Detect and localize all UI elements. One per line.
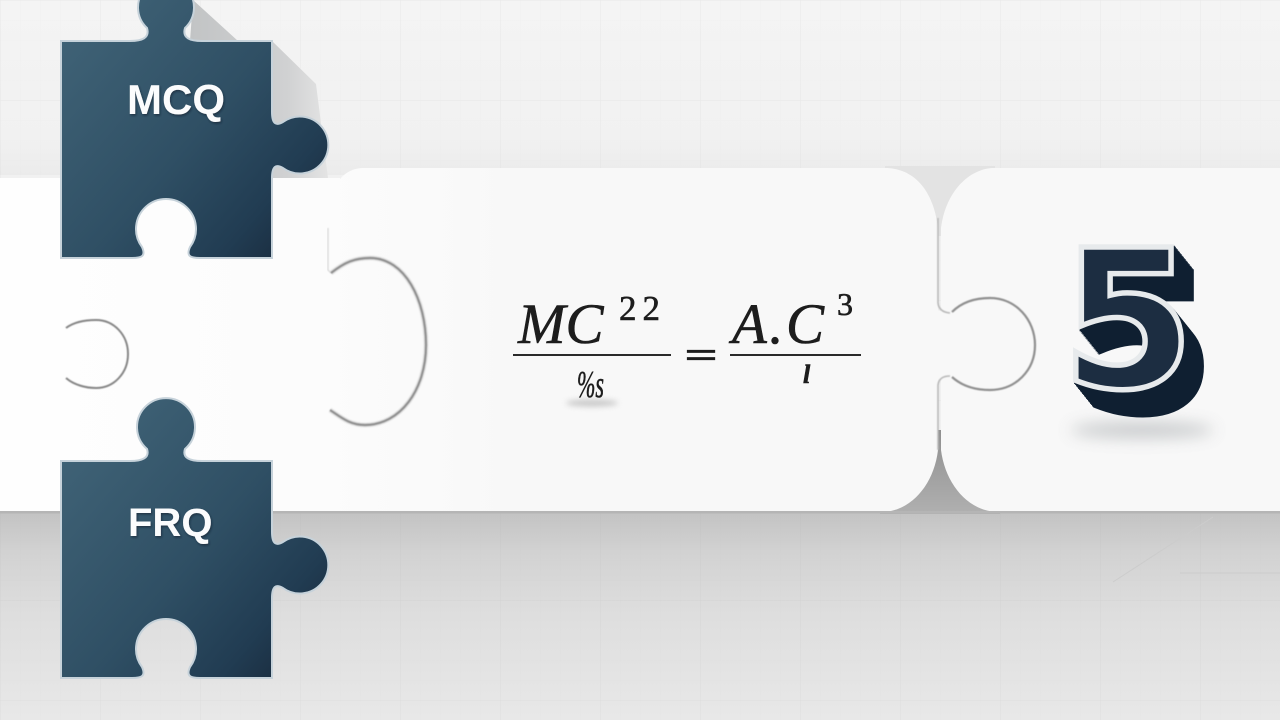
right fraction bar: [730, 354, 861, 356]
right white puzzle piece: [941, 168, 1280, 512]
equation shadow: [566, 400, 618, 406]
panel: white puzzle band: [0, 166, 1280, 514]
seam: middle piece left edge: [328, 228, 331, 273]
band lower edge: [0, 511, 1280, 514]
puzzle piece: MCQ: [61, 0, 328, 258]
seam: vertical edge between middle and right pieces: [938, 218, 950, 450]
left fraction bar: [513, 354, 671, 356]
gap wedge between pieces, bottom: [880, 430, 1000, 514]
puzzle piece: FRQ: [61, 398, 328, 678]
number 5 with white outline and extrusion: 5: [1061, 210, 1195, 433]
right exponent 3: 3: [837, 286, 853, 322]
tab of middle piece entering right piece: [936, 298, 1035, 390]
left denominator: %s: [577, 364, 604, 406]
right denominator: l: [803, 360, 811, 389]
gap wedge between pieces, top: [885, 166, 995, 236]
cast shadow behind MCQ piece: [190, 0, 328, 178]
number shadow: [1070, 422, 1214, 438]
left white band piece: [0, 178, 340, 512]
seam: left tab curve: [330, 258, 426, 425]
equals sign: =: [685, 335, 717, 375]
label: MCQ: MCQ: [127, 76, 225, 123]
left numerator MC squared: MC: [517, 293, 604, 356]
seam: small circular cut on left piece: [66, 320, 128, 388]
equation: [513, 286, 861, 406]
middle white puzzle piece: [328, 168, 938, 512]
label: FRQ: FRQ: [128, 501, 212, 545]
right numerator A.C: A.C: [728, 293, 825, 356]
icon: 3D number 5: [1061, 210, 1214, 438]
seam: right tab curve: [952, 298, 1035, 390]
left exponent 22: 22: [619, 289, 660, 328]
